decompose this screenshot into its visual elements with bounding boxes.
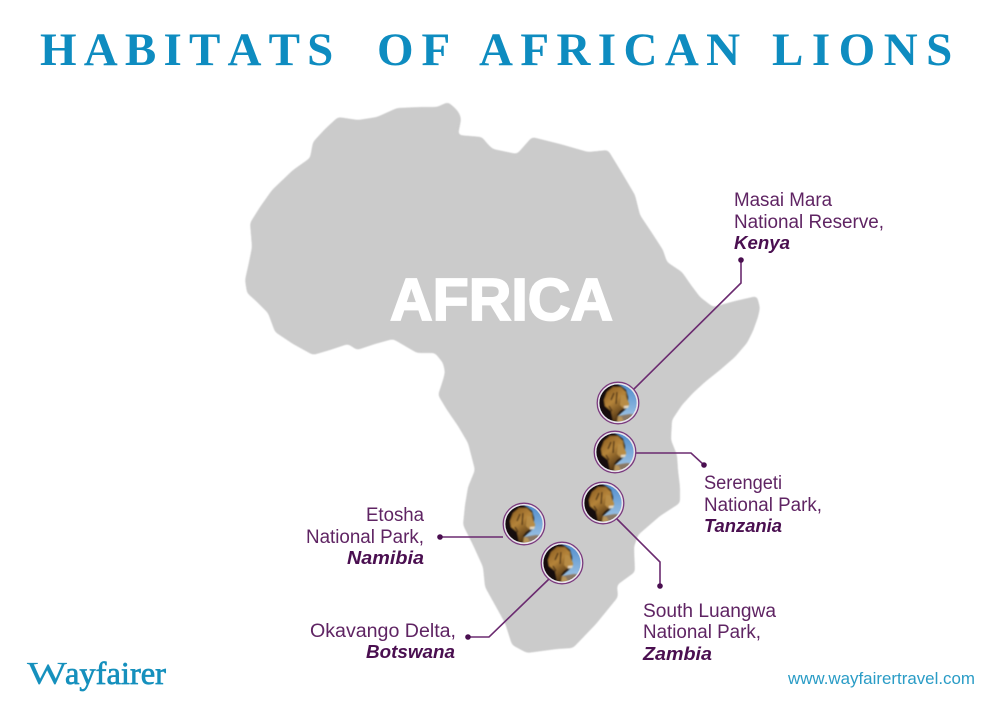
leader line: Tanzania [635,453,707,468]
map: Africa silhouette [245,102,760,653]
label: Serengeti [704,473,822,536]
label: Masai Mara: National Reserve, [734,212,884,233]
label: Masai Mara: Masai Mara [734,190,832,211]
label: Masai Mara [734,190,884,253]
title: AFRICAN [479,24,748,76]
label: South Luangwa: National Park, [643,622,761,643]
logo: Wayfairer: ayfairer [65,655,166,691]
website url: www.wayfairertravel.com [787,670,975,688]
label: Okavango Delta [310,621,456,662]
leader line: Zambia [616,518,663,589]
label: Masai Mara: Kenya [734,233,790,253]
title: LIONS [772,24,961,76]
leader line: Botswana [465,579,549,640]
title: HABITATS [40,24,341,76]
label: South Luangwa: South Luangwa [643,601,776,622]
label: Etosha [306,505,424,568]
icon: lion Kenya [597,382,639,424]
label: South Luangwa: Zambia [642,644,712,664]
label: Etosha: Namibia [347,548,424,568]
label: South Luangwa [642,601,776,664]
title: OF [377,24,458,76]
label: Serengeti: Serengeti [704,473,782,494]
icon: lion Tanzania [594,431,636,473]
label: Serengeti: National Park, [704,495,822,516]
label: Okavango Delta: Okavango Delta, [310,621,456,642]
icon: lion Namibia [503,503,545,545]
map label: AFRICA: AFRICA [390,267,613,333]
label: Okavango Delta: Botswana [366,642,455,662]
icon: lion Botswana [541,542,583,584]
label: Etosha: Etosha [366,505,424,526]
title [40,24,961,76]
logo: Wayfairer: W [27,655,68,691]
label: Etosha: National Park, [306,527,424,548]
leader line: Kenya [634,257,744,389]
label: Serengeti: Tanzania [704,516,782,536]
leader line: Namibia [437,534,503,540]
icon: lion Zambia [582,482,624,524]
